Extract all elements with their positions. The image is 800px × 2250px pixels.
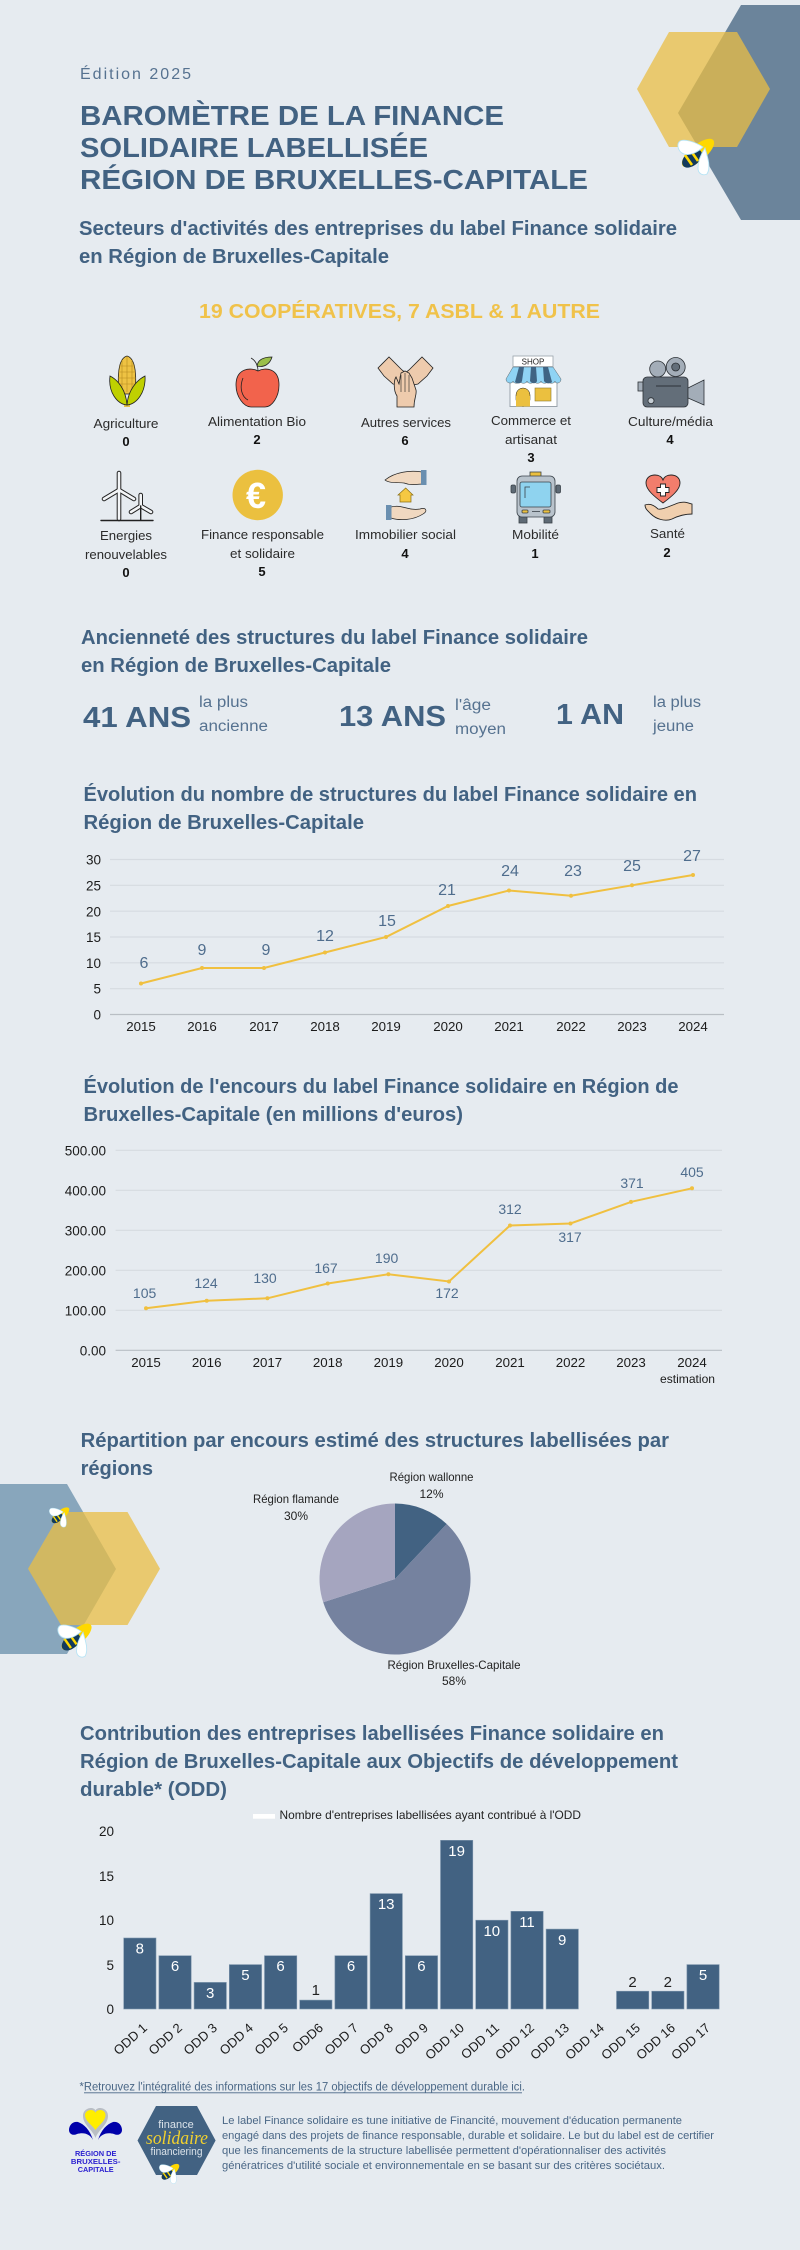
- stat: average age: l'âge: [455, 697, 491, 714]
- title: SOLIDAIRE LABELLISÉE: [80, 132, 428, 163]
- sector: commerce et artisanat: 3: [527, 450, 535, 465]
- text block: label description: engagé dans des projets de finance responsable, durable et solidaire. Le but du label est de certifier: [222, 2130, 714, 2142]
- bar chart: SDG contribution: 9: [558, 1932, 566, 1949]
- bar chart: SDG contribution: ODD 3: [180, 2020, 220, 2058]
- logo: Région de Bruxelles-Capitale: [69, 2108, 122, 2174]
- heading: number of structures: Région de Bruxelles-Capitale: [84, 812, 364, 834]
- text block: label description: que les financements de la structure labellisée permettent d'opérationnaliser des activités: [222, 2145, 667, 2157]
- pie chart: regional breakdown: 30%: [284, 1509, 308, 1523]
- stat: oldest structure: 41 ANS: [83, 702, 191, 734]
- sector: alimentation bio: [208, 357, 306, 447]
- logo: Région de Bruxelles-Capitale: BRUXELLES-: [71, 2157, 121, 2166]
- heading: seniority: Ancienneté des structures du label Finance solidaire: [81, 627, 588, 649]
- sector: agriculture: [94, 356, 158, 449]
- line chart: outstanding amounts: 100.00: [65, 1303, 106, 1318]
- line chart: number of structures: 20: [86, 904, 101, 920]
- icon: film camera: [638, 358, 704, 407]
- line chart: outstanding amounts: 2022: [556, 1355, 585, 1370]
- pie chart: regional breakdown: Région wallonne: [390, 1470, 474, 1484]
- heading: SDG contribution: [80, 1723, 678, 1801]
- icon: small bee: [49, 1505, 72, 1527]
- line chart: outstanding amounts: 2023: [616, 1355, 646, 1370]
- line chart: number of structures: 2023: [617, 1019, 647, 1034]
- sector: finance responsable et solidaire: [201, 470, 324, 579]
- stat: youngest structure: [556, 694, 701, 735]
- line chart: outstanding amounts: 371: [620, 1175, 644, 1191]
- bar chart: SDG contribution: ODD 15: [598, 2020, 643, 2063]
- icon: bus: [511, 472, 560, 523]
- sector: finance responsable et solidaire: Finance responsable: [201, 527, 324, 542]
- bar chart: SDG contribution: [99, 1824, 719, 2063]
- stat: average age: [339, 697, 506, 738]
- line chart: outstanding amounts: 0.00: [80, 1343, 106, 1358]
- logo: Finance solidaire label: financiering: [150, 2146, 202, 2158]
- bar chart: SDG contribution: ODD 2: [145, 2020, 185, 2058]
- icon: shop: SHOP: [522, 358, 544, 366]
- heading: regional breakdown: [81, 1430, 669, 1480]
- footnote: *Retrouvez l'intégralité des informations sur les 17 objectifs de développement durable ici.: [80, 2082, 525, 2094]
- callout: structure types: 19 COOPÉRATIVES, 7 ASBL & 1 AUTRE: [199, 300, 600, 323]
- bar chart: SDG contribution: ODD 14: [562, 2020, 607, 2063]
- sector: énergies renouvelables: Energies: [100, 528, 153, 543]
- line chart: number of structures: 24: [501, 863, 519, 880]
- line chart: outstanding amounts: [65, 1143, 722, 1386]
- heading: sectors: en Région de Bruxelles-Capitale: [79, 246, 389, 268]
- text block: label description: génératrices d'utilité sociale et environnementale en se basant sur des critères sociétaux.: [222, 2160, 665, 2172]
- bar chart: SDG contribution: 0: [106, 2002, 114, 2017]
- sector: santé: [645, 475, 692, 560]
- bar chart: SDG contribution: ODD 4: [216, 2020, 256, 2058]
- stat: oldest structure: la plus: [199, 694, 248, 711]
- bar chart: SDG contribution: 2: [628, 1974, 637, 1991]
- decorative hexagons left: [0, 1484, 160, 1654]
- bar chart: SDG contribution: ODD 10: [422, 2020, 467, 2063]
- sector: immobilier social: Immobilier social: [355, 527, 456, 542]
- bar chart: SDG contribution: 8: [136, 1940, 144, 1958]
- heading: regional breakdown: régions: [81, 1458, 153, 1480]
- line chart: outstanding amounts: 2020: [434, 1355, 464, 1370]
- line chart: number of structures: 9: [262, 942, 271, 959]
- line chart: number of structures: 10: [86, 956, 101, 971]
- bar chart: SDG contribution: 10: [99, 1913, 114, 1928]
- bar chart: SDG contribution: 6: [276, 1958, 285, 1975]
- line chart: number of structures: 21: [438, 882, 456, 899]
- heading: seniority: [81, 627, 588, 677]
- sector: agriculture: 0: [122, 434, 130, 449]
- sector: autres services: [361, 357, 451, 448]
- line chart: outstanding amounts: 400.00: [65, 1183, 106, 1198]
- logo: Région de Bruxelles-Capitale: RÉGION DE: [75, 2149, 116, 2158]
- pie chart: regional breakdown: 12%: [419, 1487, 444, 1501]
- icon: joined hands: [378, 357, 433, 407]
- bar chart: SDG contribution: 13: [378, 1896, 395, 1913]
- line chart: number of structures: 2020: [433, 1019, 463, 1034]
- bar chart: SDG contribution: ODD 13: [527, 2020, 572, 2063]
- line chart: outstanding amounts: 124: [194, 1275, 218, 1291]
- icon: large bee: [58, 1619, 96, 1657]
- edition label: Édition 2025: [80, 64, 191, 83]
- heading: outstanding amounts: Évolution de l'encours du label Finance solidaire en Région de: [84, 1075, 678, 1098]
- heading: seniority: en Région de Bruxelles-Capitale: [81, 655, 391, 677]
- icon: heart in hand: [645, 475, 692, 520]
- line chart: number of structures: 2021: [494, 1019, 524, 1034]
- line chart: outstanding amounts: 312: [498, 1201, 522, 1217]
- title: [80, 100, 588, 195]
- line chart: outstanding amounts: 2024: [677, 1355, 707, 1370]
- line chart: outstanding amounts: 2016: [192, 1355, 221, 1370]
- line chart: number of structures: 25: [623, 858, 641, 875]
- heading: number of structures: [84, 783, 697, 834]
- sector: santé: Santé: [650, 526, 685, 541]
- heading: sectors: [79, 218, 677, 268]
- stat: average age: moyen: [455, 721, 506, 738]
- title: RÉGION DE BRUXELLES-CAPITALE: [80, 164, 588, 195]
- line chart: number of structures: 2018: [310, 1019, 340, 1034]
- bar chart: SDG contribution: ODD 5: [251, 2020, 291, 2058]
- pie chart: regional breakdown: Région Bruxelles-Capitale: [388, 1658, 521, 1672]
- line chart: outstanding amounts: 167: [314, 1260, 338, 1276]
- title: BAROMÈTRE DE LA FINANCE: [80, 100, 504, 131]
- bar chart: SDG contribution: 10: [483, 1923, 500, 1940]
- line chart: outstanding amounts: 200.00: [65, 1263, 106, 1278]
- stat: youngest structure: 1 AN: [556, 699, 624, 731]
- bar chart: SDG contribution: 15: [99, 1869, 114, 1884]
- line chart: outstanding amounts: 130: [253, 1270, 277, 1286]
- line chart: number of structures: 30: [86, 852, 101, 868]
- icon: apple: [236, 357, 279, 407]
- sector: énergies renouvelables: 0: [122, 565, 130, 580]
- sector: culture/média: 4: [666, 432, 674, 447]
- line chart: outstanding amounts: 172: [435, 1285, 459, 1301]
- sector: énergies renouvelables: [85, 473, 167, 580]
- legend: Nombre d'entreprises labellisées ayant contribué à l'ODD: [280, 1808, 581, 1822]
- bar chart: SDG contribution: 6: [347, 1958, 355, 1975]
- line chart: outstanding amounts: 2019: [374, 1355, 403, 1370]
- sector: mobilité: 1: [531, 546, 539, 561]
- line chart: number of structures: 15: [86, 930, 101, 945]
- heading: outstanding amounts: Bruxelles-Capitale (en millions d'euros): [84, 1104, 463, 1126]
- bar chart: SDG contribution: ODD 16: [633, 2020, 678, 2063]
- bar chart: SDG contribution: 20: [99, 1824, 114, 1839]
- heading: regional breakdown: Répartition par encours estimé des structures labellisées par: [81, 1430, 669, 1452]
- sector: finance responsable et solidaire: 5: [258, 564, 266, 579]
- text block: label description: [222, 2115, 714, 2172]
- heading: number of structures: Évolution du nombre de structures du label Finance solidaire en: [84, 783, 697, 806]
- bar chart: SDG contribution: ODD 11: [458, 2020, 502, 2062]
- text block: label description: Le label Finance solidaire es tune initiative de Financité, mouvement d'éducation permanente: [222, 2115, 682, 2127]
- line chart: outstanding amounts: 2018: [313, 1355, 342, 1370]
- sector: agriculture: Agriculture: [94, 416, 158, 431]
- heading: sectors: Secteurs d'activités des entreprises du label Finance solidaire: [79, 218, 677, 240]
- stat: youngest structure: la plus: [653, 694, 701, 711]
- bar chart: SDG contribution: 5: [106, 1958, 114, 1973]
- line chart: outstanding amounts: 317: [558, 1229, 582, 1245]
- bar chart: SDG contribution: 6: [171, 1958, 179, 1975]
- panel: sectors grid: [85, 356, 714, 580]
- stat: oldest structure: ancienne: [199, 718, 268, 735]
- stat: oldest structure: [83, 694, 268, 735]
- line chart: number of structures: 23: [564, 863, 582, 880]
- bar chart: SDG contribution: ODD 8: [356, 2020, 396, 2058]
- bar chart: SDG contribution: ODD 7: [321, 2020, 361, 2058]
- sector: mobilité: Mobilité: [512, 527, 559, 542]
- line chart: number of structures: 5: [93, 982, 101, 996]
- line chart: number of structures: 2022: [556, 1019, 586, 1034]
- bar chart: SDG contribution: 5: [699, 1967, 707, 1984]
- heading: SDG contribution: Région de Bruxelles-Capitale aux Objectifs de développement: [80, 1751, 678, 1773]
- line chart: number of structures: 27: [683, 848, 701, 865]
- line chart: outstanding amounts: 2017: [253, 1355, 282, 1370]
- icon: euro coin: €: [246, 475, 266, 516]
- pie chart: regional breakdown: [253, 1470, 521, 1688]
- sector: alimentation bio: Alimentation Bio: [208, 414, 306, 429]
- sector: commerce et artisanat: [491, 356, 571, 465]
- line chart: number of structures: 6: [140, 955, 149, 972]
- sector: culture/média: [628, 358, 714, 447]
- bar chart: SDG contribution: 11: [519, 1914, 535, 1931]
- line chart: number of structures: 25: [86, 878, 101, 894]
- icon: hands and house: [385, 470, 426, 520]
- sector: santé: 2: [663, 545, 671, 560]
- bar chart: SDG contribution: ODD 1: [110, 2020, 150, 2058]
- sector: commerce et artisanat: Commerce et: [491, 413, 571, 428]
- sector: culture/média: Culture/média: [628, 414, 714, 429]
- line chart: outstanding amounts: 300.00: [65, 1223, 106, 1238]
- bar chart: SDG contribution: 2: [664, 1974, 672, 1991]
- pie chart: regional breakdown: Région flamande: [253, 1492, 339, 1506]
- heading: outstanding amounts: [84, 1075, 678, 1126]
- line chart: number of structures: 15: [378, 913, 396, 930]
- sector: commerce et artisanat: artisanat: [505, 432, 557, 447]
- stat: youngest structure: jeune: [652, 718, 694, 735]
- sector: énergies renouvelables: renouvelables: [85, 547, 167, 562]
- sector: immobilier social: [355, 470, 456, 561]
- heading: SDG contribution: durable* (ODD): [80, 1779, 227, 1801]
- line chart: number of structures: 9: [198, 942, 207, 959]
- line chart: outstanding amounts: 405: [680, 1164, 704, 1180]
- line chart: number of structures: 0: [93, 1008, 101, 1022]
- logo: Finance solidaire label: finance: [158, 2119, 194, 2131]
- line chart: outstanding amounts: 2021: [495, 1355, 525, 1370]
- sector: alimentation bio: 2: [253, 432, 261, 447]
- logo: Finance solidaire label: [138, 2106, 216, 2184]
- bar chart: SDG contribution: ODD6: [289, 2020, 326, 2055]
- line chart: number of structures: [86, 848, 724, 1034]
- line chart: number of structures: 2024: [678, 1019, 708, 1034]
- bar chart: SDG contribution: 19: [448, 1843, 465, 1860]
- pie chart: regional breakdown: 58%: [442, 1674, 466, 1688]
- bar chart: SDG contribution: ODD 9: [391, 2020, 431, 2058]
- heading: SDG contribution: Contribution des entreprises labellisées Finance solidaire en: [80, 1723, 664, 1745]
- decorative hexagons top right: [637, 5, 800, 220]
- line chart: outstanding amounts: 190: [375, 1250, 398, 1266]
- bar chart: SDG contribution: 6: [417, 1958, 426, 1975]
- sector: finance responsable et solidaire: et solidaire: [230, 546, 295, 561]
- icon: bee top right: [678, 134, 718, 175]
- line chart: outstanding amounts: estimation: [660, 1372, 715, 1386]
- sector: mobilité: [511, 472, 560, 561]
- bar chart: SDG contribution: 5: [241, 1967, 250, 1984]
- logo: Finance solidaire label: solidaire: [146, 2129, 208, 2149]
- line chart: outstanding amounts: 500.00: [65, 1143, 106, 1158]
- stat: average age: 13 ANS: [339, 701, 446, 733]
- bar chart: SDG contribution: ODD 17: [668, 2020, 713, 2063]
- line chart: number of structures: 2019: [371, 1019, 401, 1034]
- bar chart: SDG contribution: 1: [312, 1982, 320, 1999]
- sector: autres services: Autres services: [361, 415, 451, 430]
- line chart: number of structures: 2016: [187, 1019, 217, 1034]
- sector: immobilier social: 4: [401, 546, 409, 561]
- line chart: outstanding amounts: 105: [133, 1285, 156, 1301]
- bar chart: SDG contribution: 3: [206, 1985, 214, 2002]
- line chart: number of structures: 2017: [249, 1019, 279, 1034]
- sector: autres services: 6: [401, 433, 409, 448]
- bar chart: SDG contribution: ODD 12: [492, 2020, 537, 2063]
- logo: Région de Bruxelles-Capitale: CAPITALE: [78, 2165, 114, 2174]
- icon: corn: [110, 356, 145, 407]
- line chart: number of structures: 12: [316, 928, 334, 945]
- line chart: number of structures: 2015: [126, 1019, 156, 1034]
- icon: wind turbines: [101, 473, 153, 520]
- line chart: outstanding amounts: 2015: [131, 1355, 161, 1370]
